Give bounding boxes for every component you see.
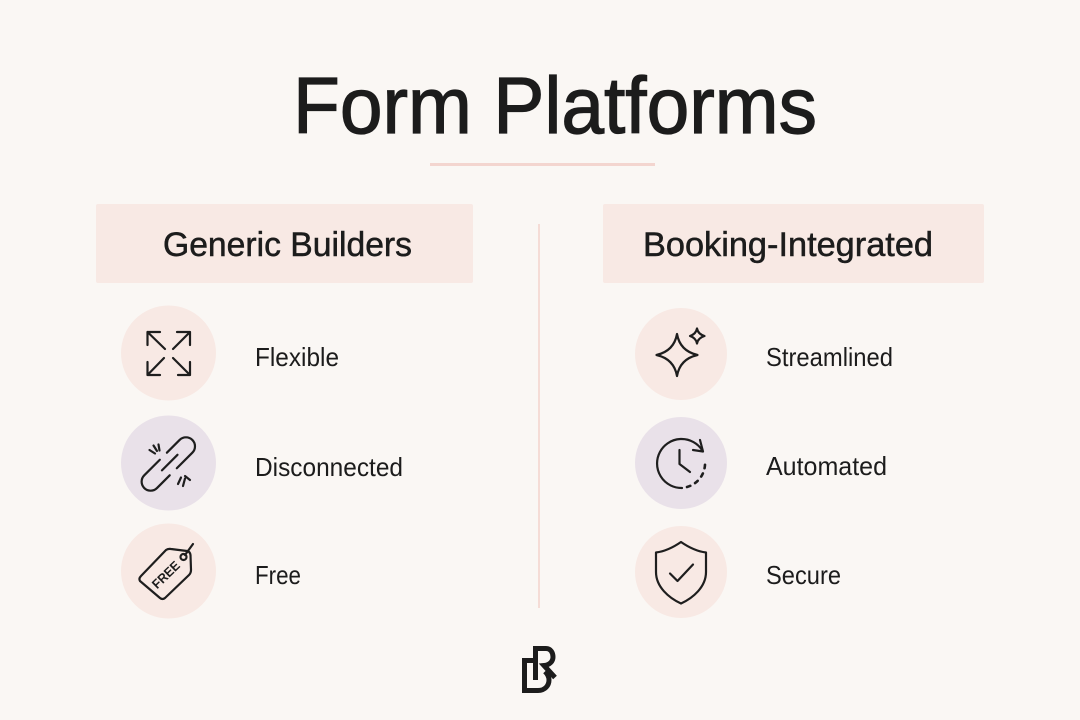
- icon: expand arrows: [148, 332, 190, 375]
- title underline: [430, 163, 655, 166]
- label: free: Free: [255, 560, 301, 590]
- icon circle: disconnected: [121, 416, 216, 510]
- heading: booking-integrated: Booking-Integrated: [643, 226, 933, 264]
- heading: generic builders: Generic Builders: [163, 226, 412, 264]
- panel: generic builders: [96, 204, 473, 618]
- title: Form Platforms: [293, 61, 817, 150]
- icon: broken link: [138, 434, 199, 494]
- label: automated: Automated: [766, 451, 887, 481]
- icon: free price tag: FREE: [149, 558, 183, 592]
- label: flexible: Flexible: [255, 342, 339, 372]
- icon: free price tag: [139, 544, 193, 599]
- heading background: generic builders: [96, 204, 473, 283]
- heading background: booking-integrated: [603, 204, 984, 283]
- label: streamlined: Streamlined: [766, 342, 893, 372]
- panel: booking-integrated: [603, 204, 984, 618]
- center divider: [538, 224, 540, 608]
- icon circle: secure: [635, 526, 727, 618]
- logo: BR monogram: [524, 648, 555, 690]
- icon circle: free: [121, 524, 216, 618]
- label: disconnected: Disconnected: [255, 452, 403, 482]
- icon circle: streamlined: [635, 308, 727, 400]
- icon: shield with check: [656, 542, 706, 604]
- icon circle: automated: [635, 417, 727, 509]
- icon: clock with arrow: [657, 439, 705, 488]
- icon: sparkles: [656, 328, 704, 376]
- label: secure: Secure: [766, 560, 841, 590]
- icon circle: flexible: [121, 306, 216, 400]
